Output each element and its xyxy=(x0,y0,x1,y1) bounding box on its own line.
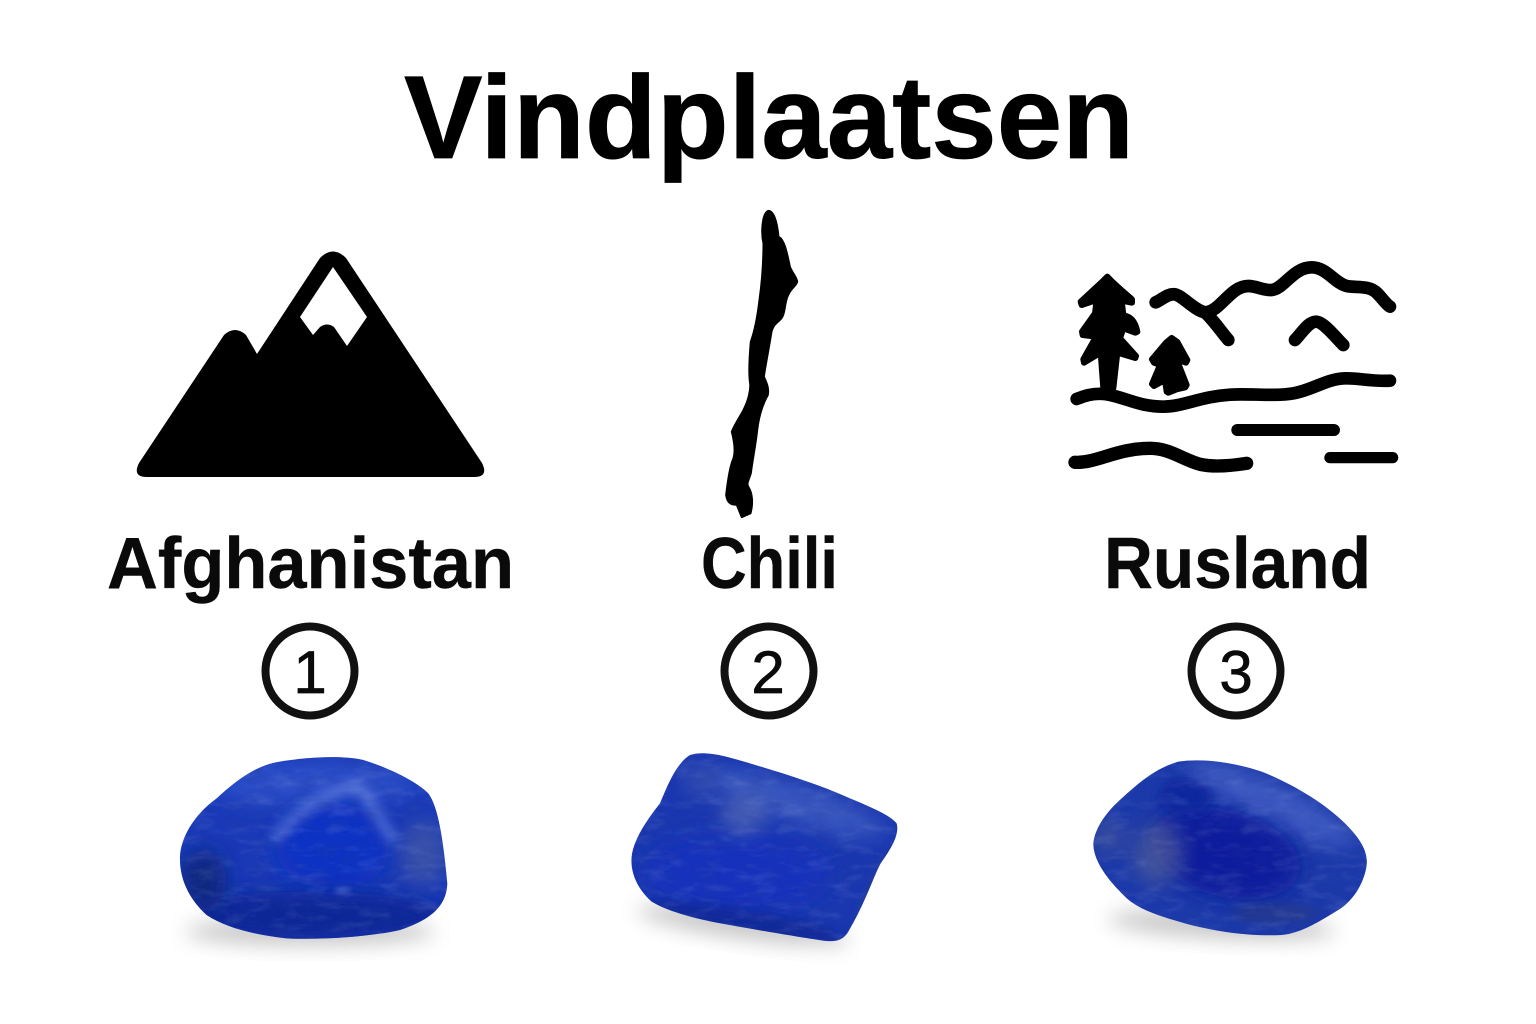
stone: lapis lazuli 3 xyxy=(1088,747,1372,944)
column: Afghanistan xyxy=(107,252,514,945)
icon: mountain xyxy=(137,252,484,477)
stone: lapis lazuli 2 xyxy=(623,747,903,953)
number badge 3 xyxy=(1192,626,1280,716)
label: Rusland: Rusland xyxy=(1104,524,1371,604)
number badge 1: 1 xyxy=(293,639,327,706)
title: Vindplaatsen xyxy=(404,52,1134,184)
number badge 2 xyxy=(724,626,814,716)
number badge 2: 2 xyxy=(751,639,785,706)
column: Chili xyxy=(623,211,903,953)
icon: landscape with trees, mountains and water xyxy=(1075,267,1393,466)
number badge 1 xyxy=(266,626,354,716)
column: Rusland xyxy=(1075,267,1393,944)
icon: map of Chile xyxy=(726,211,797,517)
number badge 3: 3 xyxy=(1219,639,1253,706)
label: Chili: Chili xyxy=(701,524,838,604)
label: Afghanistan: Afghanistan xyxy=(107,524,514,604)
stone: lapis lazuli 1 xyxy=(170,753,453,945)
